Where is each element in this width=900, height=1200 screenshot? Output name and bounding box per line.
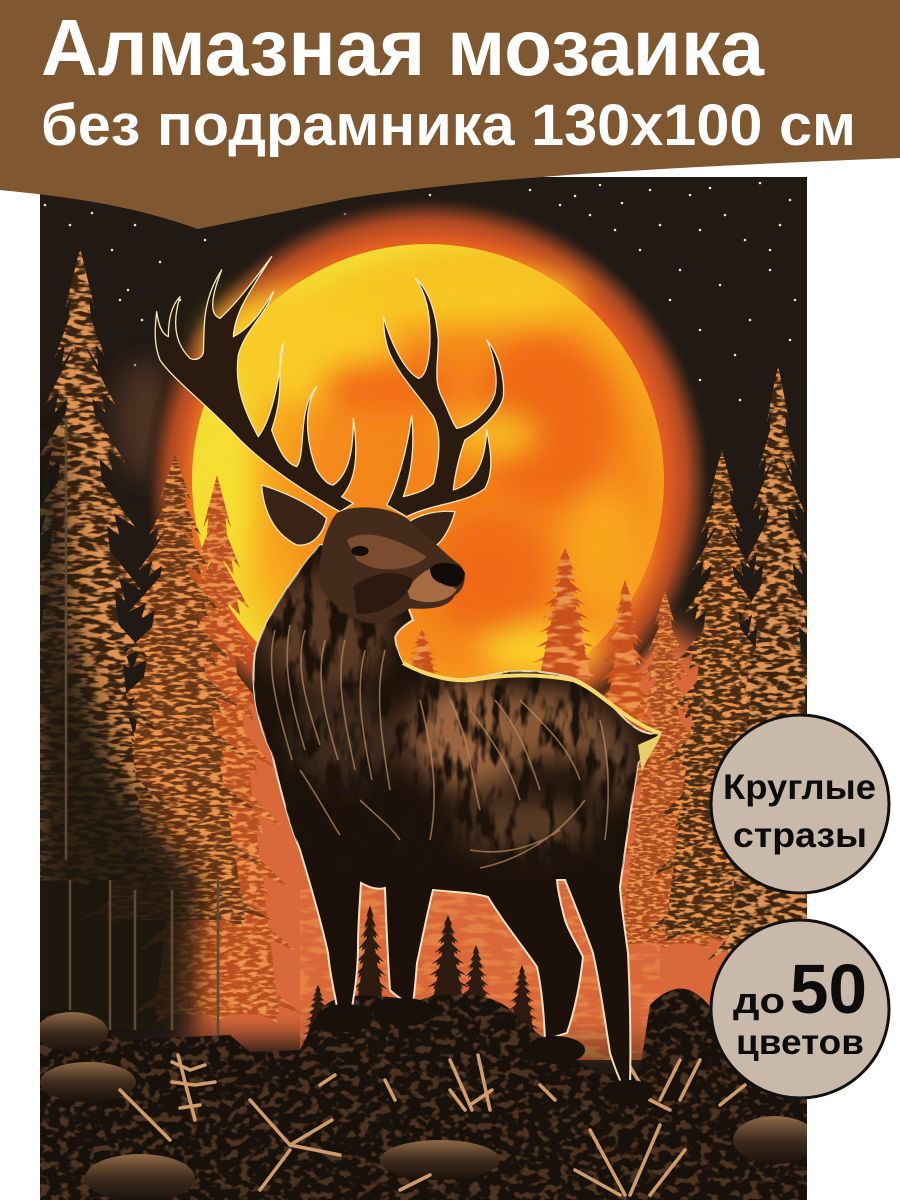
eye	[351, 546, 369, 556]
second left pine	[79, 455, 271, 927]
first left pine	[40, 248, 170, 888]
night sky	[40, 177, 807, 1075]
tree trunks	[66, 420, 218, 1040]
stars	[45, 183, 795, 400]
moon halo	[148, 196, 708, 706]
right rear pine	[621, 590, 724, 948]
badge: round rhinestones: стразы	[733, 816, 867, 855]
badge: round rhinestones	[711, 715, 889, 893]
tree: far distant pines	[400, 548, 662, 769]
badge: up to 50 colours: 50	[790, 950, 867, 1028]
ground and bushes	[36, 989, 817, 1200]
foreground plants over the hooves	[317, 998, 654, 1104]
left forest shadow	[30, 420, 200, 1040]
deer	[155, 257, 670, 1087]
rocks	[36, 1012, 817, 1200]
title: Алмазная мозаика	[41, 3, 764, 92]
tree: right pines	[621, 366, 807, 960]
header banner	[0, 0, 900, 229]
small dark firs behind legs	[300, 905, 542, 1051]
badge: up to 50 colours: цветов	[736, 1023, 864, 1062]
muzzle and forehead light	[347, 535, 427, 569]
right ear	[407, 511, 455, 548]
undergrowth	[40, 989, 807, 1200]
brown haze beside moon	[115, 360, 175, 480]
nose	[430, 563, 465, 587]
deer tail	[638, 733, 662, 772]
badge: up to 50 colours	[711, 920, 889, 1098]
right front pine	[708, 366, 807, 960]
deer head and antlers	[155, 257, 504, 623]
lower orange glow	[180, 620, 790, 1040]
subtitle: без подрамника 130х100 см	[41, 93, 856, 158]
moon surface patches	[205, 267, 645, 674]
foliage	[120, 1050, 745, 1195]
badge: round rhinestones: Круглые	[723, 768, 876, 807]
deer fur shading	[250, 540, 670, 870]
left ear	[262, 485, 327, 545]
third left pine	[132, 475, 302, 1023]
deer back rim light	[403, 663, 660, 733]
badge: up to 50 colours: до	[733, 980, 785, 1021]
tree: left pines	[40, 248, 302, 1022]
left antler	[155, 257, 356, 512]
right middle pine	[644, 450, 756, 941]
cheek shadow	[353, 573, 413, 614]
moon	[192, 244, 664, 716]
mottled foliage between the legs	[300, 870, 660, 1060]
deer body outline	[254, 545, 660, 1087]
right antler	[383, 278, 504, 517]
head	[319, 507, 465, 623]
